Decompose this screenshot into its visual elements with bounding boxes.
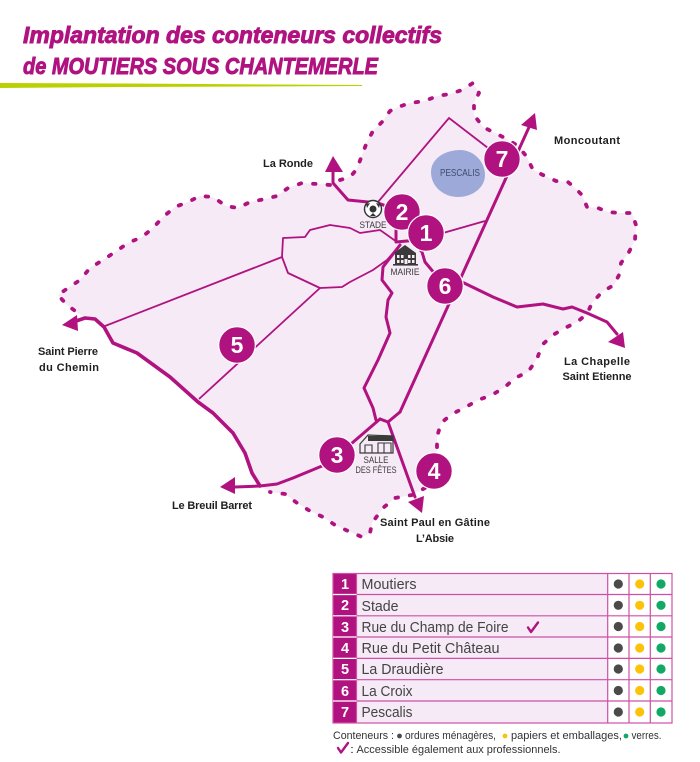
legend: : xyxy=(350,744,354,756)
marker 1 xyxy=(408,215,444,251)
icon: professional check mark xyxy=(528,622,538,632)
secondary roads xyxy=(105,118,488,399)
marker 7 xyxy=(484,141,520,177)
dots: household waste xyxy=(614,579,623,717)
marker 6: 6 xyxy=(439,273,451,299)
label: La Chapelle Saint Etienne: La Chapelle xyxy=(564,356,630,368)
row numbers: 2 xyxy=(341,598,349,614)
icon: mairie xyxy=(390,245,420,278)
icon: salle des fêtes xyxy=(356,435,396,476)
icon: stade football: STADE xyxy=(360,220,386,231)
title: Implantation des conteneurs collectifs xyxy=(23,22,442,48)
marker 2: 2 xyxy=(396,199,408,225)
label: Saint Pierre du Chemin: du Chemin xyxy=(39,362,99,374)
row names: La Draudière xyxy=(362,662,444,678)
commune area xyxy=(58,83,636,537)
row names: Rue du Petit Château xyxy=(362,641,500,657)
arrow: La Ronde xyxy=(325,156,343,172)
arrow: La Chapelle Saint Etienne xyxy=(608,332,625,348)
row names: Moutiers xyxy=(362,577,416,593)
lake: Pescalis xyxy=(431,150,485,197)
arrow: Saint Paul en Gâtine xyxy=(408,496,424,513)
arrow: Moncoutant xyxy=(521,113,537,130)
map xyxy=(38,83,636,545)
marker 3: 3 xyxy=(331,442,343,468)
label: Moncoutant: Moncoutant xyxy=(554,135,620,147)
label: Saint Pierre du Chemin: Saint Pierre xyxy=(38,346,98,358)
row numbers: 1 xyxy=(341,577,349,593)
row numbers: 7 xyxy=(341,705,349,721)
row names: La Croix xyxy=(362,684,413,700)
arrow: Le Breuil Barret xyxy=(220,477,235,494)
row numbers: 6 xyxy=(341,684,349,700)
dots: paper and packaging xyxy=(635,579,644,717)
title underline xyxy=(0,83,362,88)
row numbers: 4 xyxy=(341,641,349,657)
legend: Accessible également aux professionnels. xyxy=(356,744,560,756)
label: La Ronde: La Ronde xyxy=(263,158,313,170)
marker 3 xyxy=(319,437,355,473)
arrow: Saint Pierre du Chemin xyxy=(62,315,78,331)
lake: Pescalis: PESCALIS xyxy=(440,168,480,179)
title: de MOUTIERS SOUS CHANTEMERLE xyxy=(23,53,379,79)
marker 2 xyxy=(384,194,420,230)
label: Saint Paul en Gâtine / L'Absie: L’Absie xyxy=(416,533,454,545)
location markers xyxy=(219,141,520,489)
icon: salle des fêtes: SALLE xyxy=(364,455,388,466)
arrowheads xyxy=(62,113,625,513)
label: Le Breuil Barret: Le Breuil Barret xyxy=(172,500,252,512)
label: Saint Pierre du Chemin xyxy=(38,346,99,374)
marker 7: 7 xyxy=(496,146,508,172)
icon: legend check mark xyxy=(338,743,348,752)
marker 5 xyxy=(219,327,255,363)
legend xyxy=(333,730,662,756)
dots: glass xyxy=(656,579,666,717)
marker 4 xyxy=(416,453,452,489)
main roads xyxy=(76,125,617,497)
title xyxy=(23,22,442,79)
label: Saint Paul en Gâtine / L'Absie xyxy=(380,517,490,545)
row names: Rue du Champ de Foire xyxy=(362,620,508,636)
marker 5: 5 xyxy=(231,332,244,358)
dotted commune boundary xyxy=(58,83,636,537)
marker 4: 4 xyxy=(428,458,441,484)
row names: Pescalis xyxy=(362,705,412,721)
label: Saint Paul en Gâtine / L'Absie: Saint Paul en Gâtine xyxy=(380,517,490,529)
table: collection points xyxy=(333,573,672,723)
row names: Stade xyxy=(362,599,398,615)
marker 6 xyxy=(427,268,463,304)
row numbers xyxy=(341,577,349,721)
label: La Chapelle Saint Etienne xyxy=(562,356,632,383)
row numbers: 3 xyxy=(341,620,349,636)
icon: salle des fêtes: DES FÊTES xyxy=(356,465,396,476)
place names xyxy=(38,135,632,545)
legend: Conteneurs : xyxy=(333,730,394,742)
marker 1: 1 xyxy=(420,220,433,246)
icon: stade football xyxy=(360,200,386,231)
row names xyxy=(362,577,508,721)
legend: ordures ménagères, xyxy=(405,730,496,742)
legend: papiers et emballages, xyxy=(511,730,622,742)
icon: mairie: MAIRIE xyxy=(390,267,420,278)
legend: verres. xyxy=(632,730,662,742)
row numbers: 5 xyxy=(341,662,349,678)
label: La Chapelle Saint Etienne: Saint Etienne xyxy=(562,371,632,383)
